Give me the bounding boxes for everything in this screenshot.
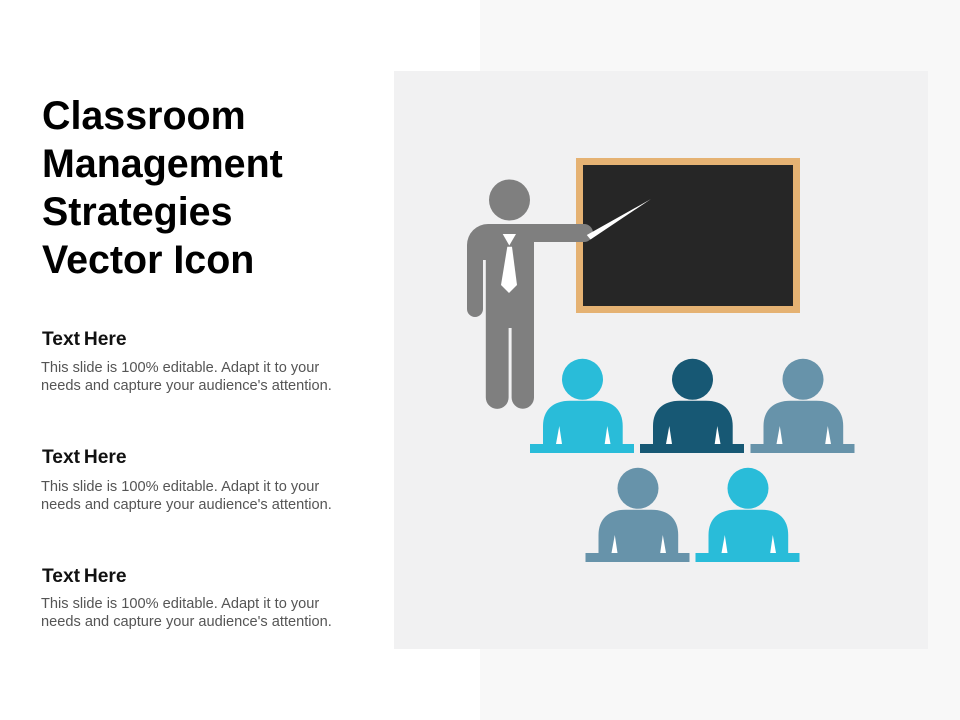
text block 3 heading: Text Here: [42, 566, 127, 587]
icon: student, back right: [696, 468, 800, 562]
icon: student, front centre: [640, 359, 744, 453]
icon: blackboard: [576, 158, 800, 313]
right background band: [480, 0, 960, 720]
text block 3 body: This slide is 100% editable. Adapt it to your: [41, 596, 319, 612]
text block 2 heading: Text Here: [42, 447, 127, 468]
text block 2 body: This slide is 100% editable. Adapt it to your: [41, 479, 319, 495]
text block 1 body: This slide is 100% editable. Adapt it to your: [41, 360, 319, 376]
title: Strategies: [42, 190, 232, 234]
text block 1 body: [41, 360, 332, 394]
title: [42, 94, 283, 282]
icon: teacher: [467, 180, 651, 409]
panel: illustration background: [394, 71, 928, 649]
title: Management: [42, 142, 283, 186]
text block 3 body: needs and capture your audience's attention.: [41, 614, 332, 630]
text block 2 body: needs and capture your audience's attention.: [41, 497, 332, 513]
icon: student, front right: [750, 359, 854, 453]
icon: student, front left: [530, 359, 634, 453]
text block 2 body: [41, 479, 332, 513]
text block 1 heading: Text Here: [42, 329, 127, 350]
icon: student, back left: [586, 468, 690, 562]
title: Vector Icon: [42, 238, 254, 282]
text block 3 body: [41, 596, 332, 630]
title: Classroom: [42, 94, 246, 138]
text block 1 body: needs and capture your audience's attention.: [41, 378, 332, 394]
